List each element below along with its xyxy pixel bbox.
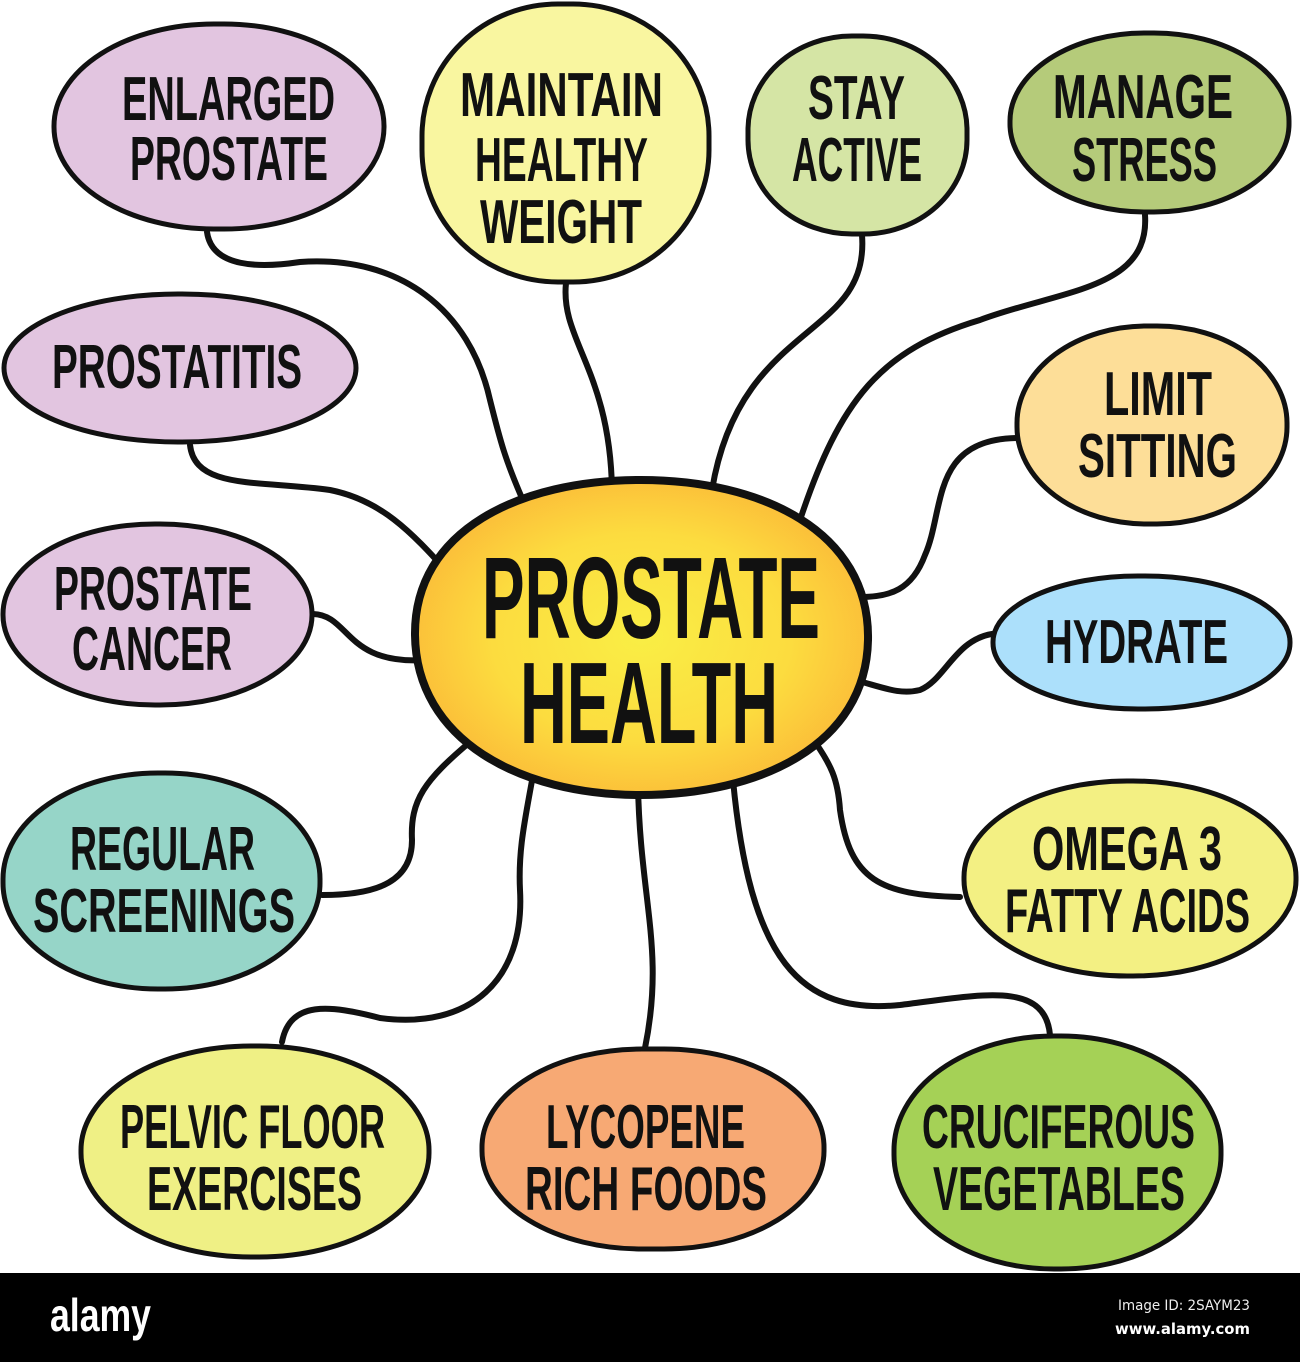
node: enlarged prostate [54, 24, 384, 229]
node: stay active: STAY [808, 64, 905, 133]
central topic: prostate health: HEALTH [520, 638, 778, 768]
node: enlarged prostate: ENLARGED [122, 65, 335, 134]
node: manage stress [1010, 33, 1289, 212]
node: lycopene rich foods: RICH FOODS [525, 1155, 767, 1224]
node: pelvic floor exercises [81, 1046, 429, 1257]
node: prostate cancer [3, 524, 312, 705]
central topic: prostate health: PROSTATE [482, 533, 820, 663]
node: prostate cancer: PROSTATE [54, 555, 252, 624]
footer bar: alamy [50, 1289, 151, 1341]
node: stay active [748, 36, 967, 234]
node: regular screenings: REGULAR [70, 815, 255, 884]
node: prostatitis: PROSTATITIS [52, 333, 302, 402]
node: cruciferous vegetables [894, 1036, 1221, 1269]
node: prostatitis [4, 294, 356, 442]
node: maintain healthy weight [422, 4, 709, 282]
node: stay active: ACTIVE [792, 126, 922, 195]
node: regular screenings [3, 773, 320, 989]
node: lycopene rich foods [482, 1049, 824, 1249]
node: omega 3 fatty acids [964, 781, 1296, 976]
node: limit sitting [1017, 326, 1287, 524]
node: maintain healthy weight: MAINTAIN [460, 61, 663, 130]
node: maintain healthy weight: WEIGHT [480, 188, 642, 257]
footer bar: www.alamy.com [1115, 1320, 1250, 1338]
footer bar: Image ID: 2SAYM23 [1118, 1298, 1250, 1314]
node: pelvic floor exercises: EXERCISES [147, 1155, 362, 1224]
node: limit sitting: LIMIT [1104, 360, 1212, 429]
node: maintain healthy weight: HEALTHY [475, 126, 648, 195]
node: regular screenings: SCREENINGS [33, 877, 295, 946]
node: hydrate [993, 576, 1290, 709]
node: lycopene rich foods: LYCOPENE [546, 1093, 745, 1162]
node: enlarged prostate: PROSTATE [130, 125, 328, 194]
connector lines [190, 215, 1145, 1048]
node: prostate cancer: CANCER [72, 615, 232, 684]
central topic: prostate health [415, 480, 868, 795]
footer bar [0, 1273, 1300, 1362]
node: pelvic floor exercises: PELVIC FLOOR [120, 1093, 385, 1162]
